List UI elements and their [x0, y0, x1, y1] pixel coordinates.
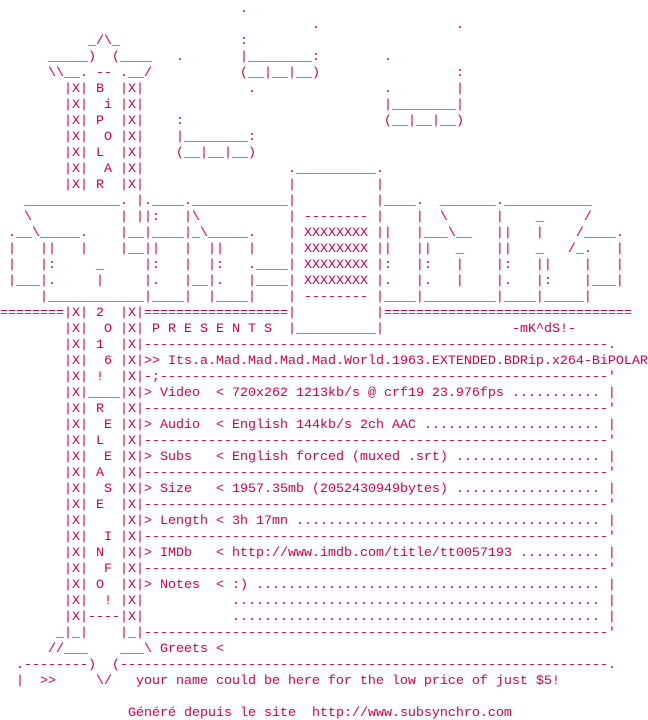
- panel: release information: ----------------------------------------------------------': [144, 626, 616, 641]
- central box with X block: .__________. | | | | | -------- | | XXXXXXXX | | XXXXXXXX | | XXXXXXXX | | XXXXXXXX | | -------- | | | |__________|: [288, 162, 384, 337]
- panel: release information: .............................................. |: [232, 610, 616, 625]
- size row: > Size < 1957.35mb (2052430949bytes) .................. |: [144, 482, 616, 497]
- audio row: > Audio < English 144kb/s 2ch AAC ...................... |: [144, 418, 616, 433]
- greets block: //___ ___\ Greets < .--------) (-------------------------------------------------------------. | >> \/ your name could be here for the low price of just $5!: [16, 642, 616, 689]
- tower lower: 2016! RELEASE INFO!: |X| 2 |X| |X| O |X| |X| 1 |X| |X| 6 |X| |X| ! |X| |X|____|X| |X| R |X| |X| E |X| |X| L |X| |X| E |X| |X| A |X| |X| S |X| |X| E |X| |X| |X| |X| I |X| |X| N |X| |X| F |X| |X| O |X| |X| ! |X| |X|----|X| _|_| |_|: [56, 306, 144, 641]
- double rule middle: ==================: [144, 306, 288, 321]
- panel: release information: .............................................. |: [232, 594, 616, 609]
- panel: release information: -;--------------------------------------------------------': [144, 370, 616, 385]
- stage block middle: . . : |________: (__|__|__) .: [240, 2, 320, 97]
- length row: > Length < 3h 17mn ...................................... |: [144, 514, 616, 529]
- tower top: BiPOLAR letters in pillar: _/\_ _____) (____ \\__. -- .__/ |X| B |X| |X| i |X| |X| P |X| |X| O |X| |X| L |X| |X| A |X| |X| R |X|: [48, 34, 152, 193]
- panel: release information: ----------------------------------------------------------': [144, 530, 616, 545]
- double rule right: ===============================: [384, 306, 632, 321]
- stage block left: . : |________: (__|__|__): [176, 50, 256, 161]
- heading: presents: P R E S E N T S: [152, 322, 272, 337]
- panel: release information: ----------------------------------------------------------': [144, 434, 616, 449]
- double rule left: ========: [0, 306, 64, 321]
- panel: release information: ----------------------------------------------------------': [144, 562, 616, 577]
- notes row: > Notes < :) ........................................... |: [144, 578, 616, 593]
- release title: >> Its.a.Mad.Mad.Mad.Mad.World.1963.EXTENDED.BDRip.x264-BiPOLAR: [144, 354, 648, 369]
- panel: release information: ----------------------------------------------------------': [144, 466, 616, 481]
- imdb row: > IMDb < http://www.imdb.com/title/tt0057193 .......... |: [144, 546, 616, 561]
- credit: mK^dS: -mK^dS!-: [512, 322, 576, 337]
- panel: release information: [144, 338, 648, 641]
- stage block right: . . : . | |________| (__|__|__): [384, 18, 464, 129]
- logo: large ascii lettering: ____________. |.____.____________ ____. _______.___________ \ | ||: |\ | \ | _ / .__\_____. |__|____|_\_____. | |___\__ || | /____. | || | |__|| | || | | || _ || _ /_. | | |: _ |: | |: .____ : |: | |: || | | |___|. | |. |__|. |____ . |. | |. |: |___| |____________|____| |____| ____|_________|____|_____|: [0, 194, 624, 305]
- panel: release information: ----------------------------------------------------------.: [144, 338, 616, 353]
- panel: release information: ----------------------------------------------------------': [144, 402, 616, 417]
- panel: release information: ----------------------------------------------------------': [144, 498, 616, 513]
- video row: > Video < 720x262 1213kb/s @ crf19 23.976fps ........... |: [144, 386, 616, 401]
- subs row: > Subs < English forced (muxed .srt) .................. |: [144, 450, 616, 465]
